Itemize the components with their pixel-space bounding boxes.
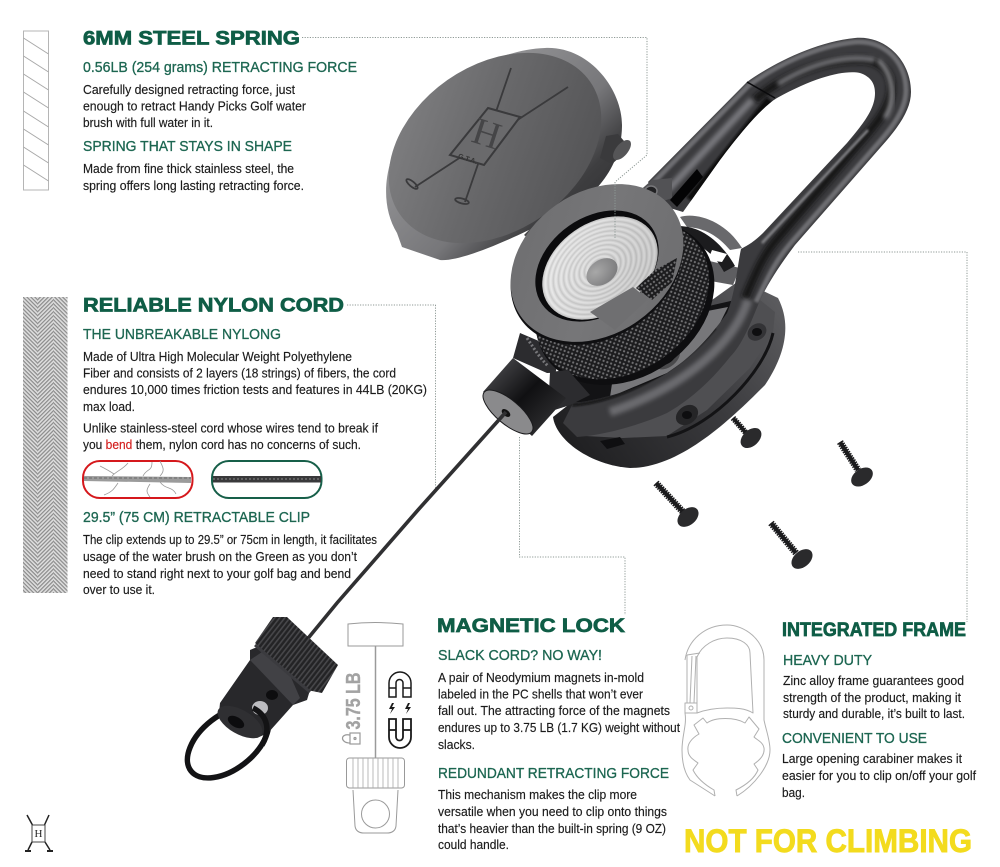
body text: versatile when you need to clip onto things [438,805,667,819]
cord exit tube [477,338,590,441]
cord line [374,646,376,758]
warning: not for climbing: NOT FOR CLIMBING [684,823,972,859]
heading: MAGNETIC LOCK [437,616,625,637]
upper cavity panel [705,260,740,285]
keyring plug [174,617,338,792]
body text: usage of the water brush on the Green as you don’t [83,550,358,564]
body text: Made from fine thick stainless steel, the [83,162,294,176]
outer outline [682,625,770,796]
tube bracket [513,333,575,412]
lower clip slot [600,437,625,449]
body text: enough to retract Handy Picks Golf water [83,100,306,114]
heading: RELIABLE NYLON CORD [83,296,344,316]
screw 3 [656,483,702,531]
body text: Zinc alloy frame guarantees good [783,674,964,688]
nylon cord [305,412,506,642]
body text: bag. [782,786,805,800]
scalloped ring opening [688,717,764,796]
outer rim [553,280,785,468]
body text: bend: you bend them, nylon cord has no concerns of such. [83,438,361,452]
body text: endures up to 3.75 LB (1.7 KG) weight without [438,721,680,735]
handle body [563,38,911,437]
lower ring arm end [590,287,648,330]
body text: Made of Ultra High Molecular Weight Polyethylene [83,350,352,364]
wedge [548,370,590,412]
subheading: SLACK CORD? NO WAY! [438,647,602,664]
cap outer shell [386,48,622,260]
pill: broken steel cord [83,461,192,498]
inner frame arc [674,216,742,272]
plug body [219,645,310,738]
body text [83,83,306,130]
body text: Large opening carabiner makes it [782,752,963,766]
panel: reliable nylon cord [23,296,427,597]
spark icons [389,703,411,714]
body text [783,674,965,721]
body text: sturdy and durable, it’s built to last. [783,707,965,721]
knurled head [255,617,338,693]
body text: bend [83,422,379,452]
body text: that’s heavier than the built-in spring (9 OZ) [438,822,666,836]
body text: over to use it. [83,583,155,597]
screw 4 [771,523,816,573]
hinge block [637,169,703,207]
cap pegs [524,134,634,247]
H logo emboss: G.T.A. [457,153,478,166]
screws [656,418,876,573]
lock icon [342,733,360,744]
body text [83,533,377,597]
body text: could handle. [438,838,509,852]
back housing [553,260,785,468]
heading: 6MM STEEL SPRING [83,28,300,50]
subheading: CONVENIENT TO USE [782,730,927,747]
dotted leader: integrated frame [798,252,967,622]
gate seam [747,82,775,98]
body text [438,671,680,752]
product: exploded retractable clip [174,13,911,792]
panel: magnetic lock [437,616,680,852]
body text [782,752,977,800]
body text: fall out. The attracting force of the magnets [438,704,670,718]
subheading: HEAVY DUTY [783,652,872,669]
plug head and body [346,758,404,833]
heading: INTEGRATED FRAME [782,620,966,641]
body text: max load. [83,400,135,414]
body text [438,788,667,852]
top cap shell [352,13,638,283]
body text: slacks. [438,738,475,752]
cord hole [500,407,512,419]
screw 2 [840,442,876,490]
crossed golf clubs emboss [405,68,568,205]
magnet icon bottom [389,719,411,748]
subheading: shape: SPRING THAT STAYS IN SHAPE [83,138,292,155]
brand logo [25,815,53,851]
subheading: retracting force: 0.56LB (254 grams) RETRACTING FORCE [83,59,357,76]
pill: nylon cord [212,461,322,498]
line drawing: magnet plug diagram [342,622,411,833]
knurled spool [504,187,746,419]
end face [477,383,539,441]
body text: easier for you to clip on/off your golf [782,769,977,783]
body text: The clip extends up to 29.5” or 75cm in length, it facilitates [83,533,377,547]
brand logo: H [35,828,43,840]
inner grey face [585,300,775,438]
coil spring [523,195,677,341]
body text: Carefully designed retracting force, just [83,83,296,97]
body text: labeled in the PC shells that won’t ever [438,688,643,702]
load label: 3.75 LB [343,672,365,730]
body text [83,162,304,193]
H logo emboss [450,108,520,166]
body text: A pair of Neodymium magnets in-mold [438,671,644,685]
body text: brush with full water in it. [83,116,213,130]
subheading: THE UNBREAKABLE NYLONG [83,326,281,343]
body text: strength of the product, making it [783,691,962,705]
body text: spring offers long lasting retracting force. [83,179,304,193]
subheading: REDUNDANT RETRACTING FORCE [438,765,669,782]
hinge [685,703,697,713]
body text: This mechanism makes the clip more [438,788,637,802]
body text [83,350,427,414]
ring gap showing spool [636,258,677,300]
magnet icon top [389,672,411,697]
gray front ring [480,151,714,378]
carabiner handle [563,38,911,437]
mid cavity [560,300,735,402]
gate opening [697,638,753,713]
gear [527,338,548,366]
body text: endures 10,000 times friction tests and features in 44LB (20KG) [83,383,427,397]
cylinder [483,358,566,436]
herringbone swatch [23,297,68,593]
cap face [352,13,638,283]
dotted leader: magnetic lock [520,437,625,615]
spring swatch [24,31,48,190]
handle shading [572,42,906,412]
body text: Fiber and consists of 2 layers (18 strings) of fibers, the cord [83,366,396,380]
dotted leader: steel spring [302,38,647,238]
panel: 6mm steel spring [24,28,357,193]
dotted leader: nylon cord [347,305,436,490]
line drawing: carabiner frame [682,625,770,796]
split ring [174,692,282,792]
subheading: 29.5” (75 CM) RETRACTABLE CLIP [83,509,310,526]
H logo emboss: H [467,110,506,158]
body text: need to stand right next to your golf bag and bend [83,567,351,581]
panel: integrated frame [782,620,977,800]
screw 1 [733,418,765,452]
pull tab [348,622,403,646]
screw holes [649,320,770,429]
ring front segment [253,708,267,745]
body text: bend: Unlike stainless-steel cord whose wires tend to break if [83,422,379,436]
